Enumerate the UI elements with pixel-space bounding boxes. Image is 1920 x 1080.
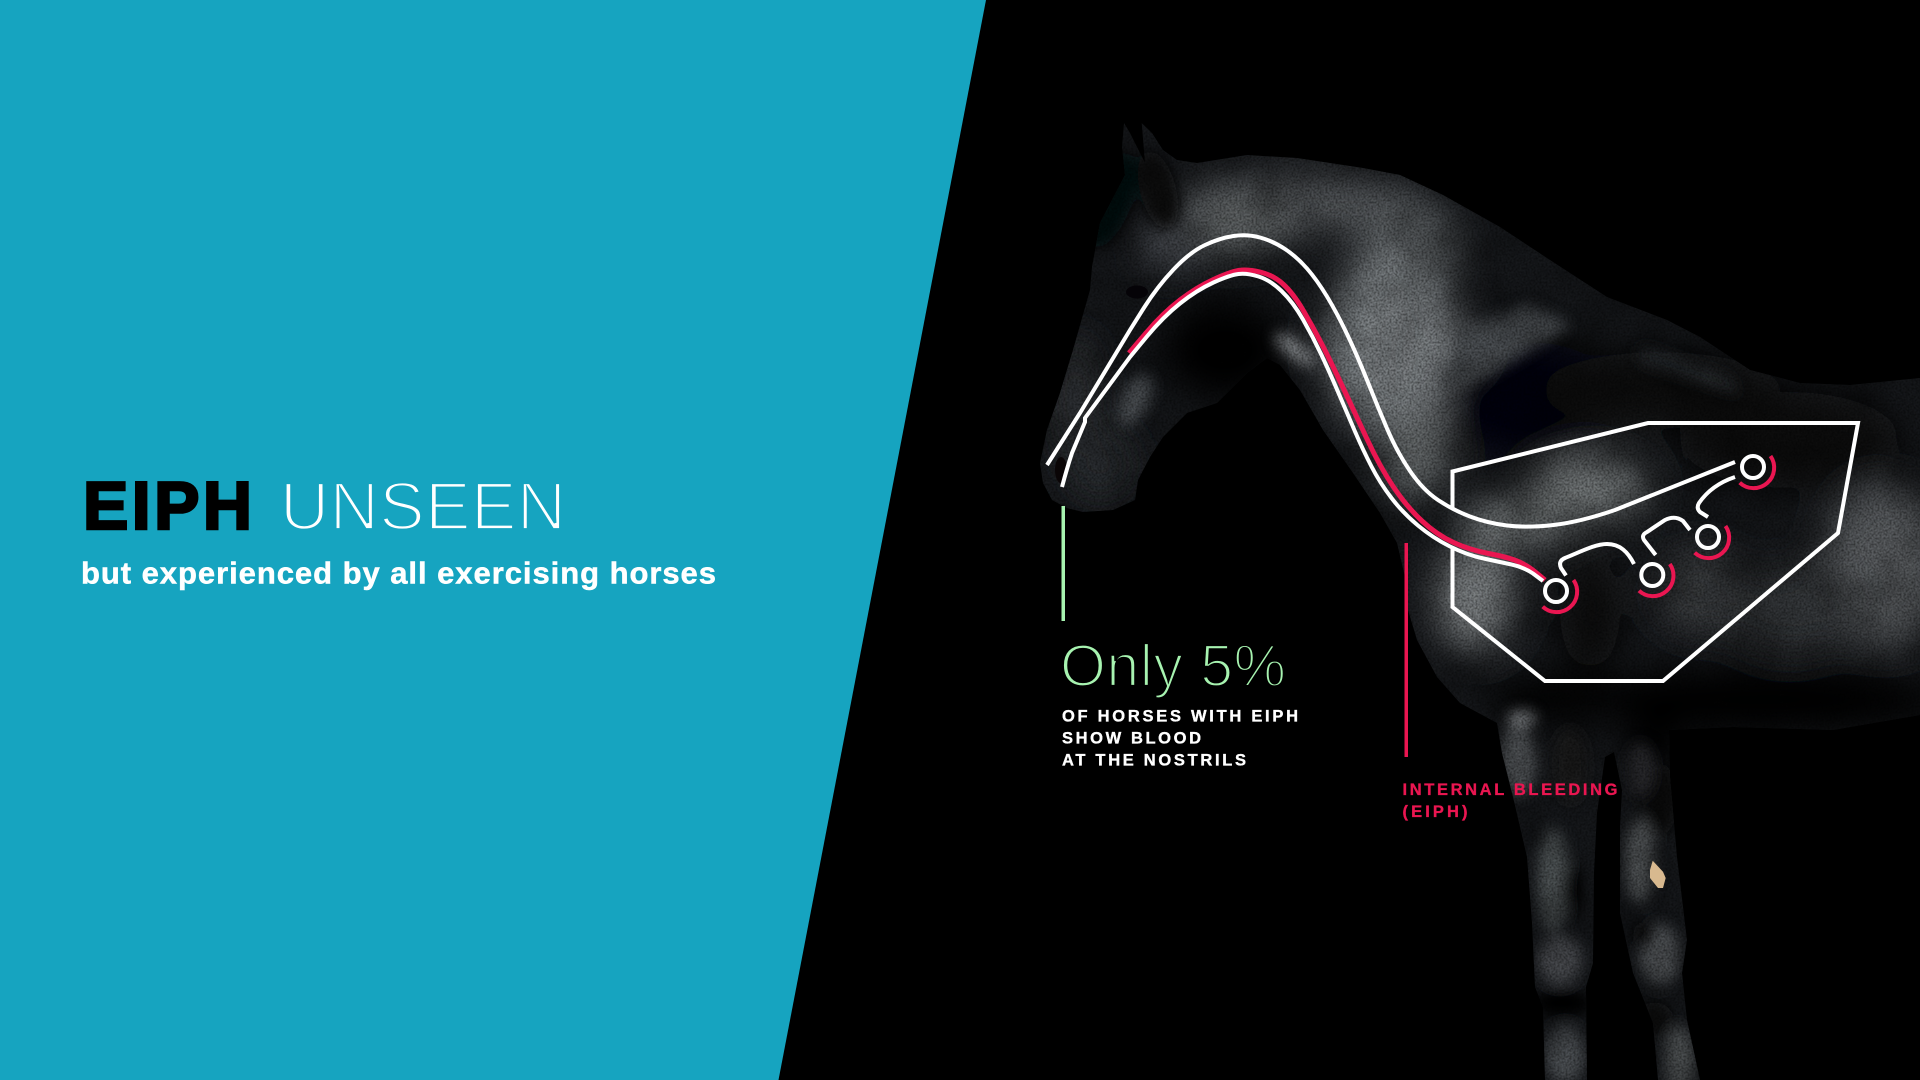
airway lower white line xyxy=(1062,274,1543,581)
horse photo xyxy=(1030,110,1920,1080)
internal bleeding red line xyxy=(1129,270,1545,580)
alveoli connectors xyxy=(1560,477,1735,576)
title: EIPH: EIPH xyxy=(83,468,252,544)
title: UNSEEN: UNSEEN xyxy=(280,468,566,544)
alveoli circles xyxy=(1545,456,1764,602)
icon: horse eye and nostril xyxy=(1055,286,1148,483)
lung outline xyxy=(1452,423,1858,681)
label: internal bleeding: (EIPH) xyxy=(1402,803,1468,821)
green pointer line xyxy=(1062,506,1065,621)
callout text: AT THE NOSTRILS xyxy=(1062,752,1246,770)
chestnut mark on leg xyxy=(1650,861,1666,888)
alveoli red arcs xyxy=(1543,456,1774,612)
airway upper white line xyxy=(1047,235,1735,527)
callout: only 5% xyxy=(1060,633,1298,770)
callout number: Only 5% xyxy=(1060,633,1286,699)
title xyxy=(83,468,566,544)
subtitle: but experienced by all exercising horses xyxy=(81,556,716,590)
callout text: OF HORSES WITH EIPH xyxy=(1062,708,1298,726)
label: internal bleeding: INTERNAL BLEEDING xyxy=(1402,781,1618,799)
red pointer line xyxy=(1404,543,1408,757)
airway diagram xyxy=(1047,235,1858,681)
callout text xyxy=(1062,708,1298,770)
callout text: SHOW BLOOD xyxy=(1062,730,1201,748)
panel: blue title panel xyxy=(0,0,986,1080)
label: internal bleeding xyxy=(1402,781,1618,821)
